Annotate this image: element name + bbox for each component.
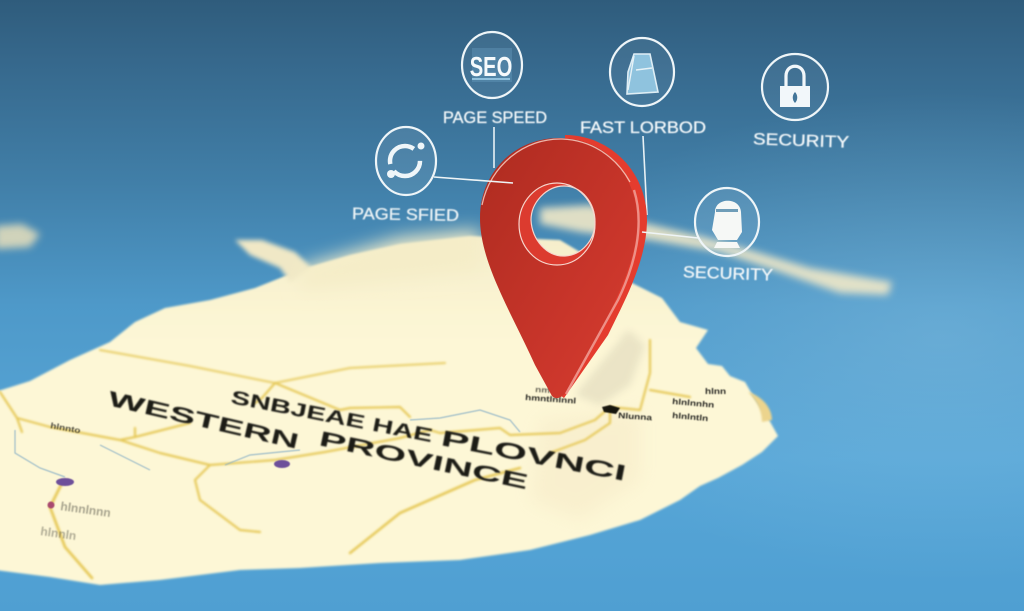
padlock icon bbox=[786, 66, 804, 88]
node: security lock bbox=[762, 54, 828, 120]
small bay sandbar bbox=[748, 392, 772, 422]
label: plovnci: PLOVNCI bbox=[439, 425, 628, 486]
rivers bbox=[15, 410, 520, 477]
label: page speed top: PAGE SPEED bbox=[443, 108, 547, 127]
node: security robot bbox=[695, 188, 759, 256]
city markers bbox=[48, 460, 290, 508]
connector lines over pin bbox=[434, 177, 698, 238]
small map labels: hlnlnnhn bbox=[672, 397, 715, 409]
pin face bbox=[480, 138, 637, 398]
small map labels: hlnn bbox=[705, 387, 726, 396]
node: page speed bbox=[376, 127, 436, 195]
map label: province names bbox=[106, 387, 628, 494]
red map pin bbox=[480, 135, 647, 398]
document icon bbox=[627, 54, 658, 94]
warm tint on map bbox=[530, 410, 640, 520]
peninsula behind pin bbox=[235, 240, 312, 282]
blurred far edge of land bbox=[300, 230, 480, 290]
main landmass bbox=[0, 236, 778, 585]
label: security top right: SECURITY bbox=[753, 129, 849, 152]
helmet icon bbox=[712, 201, 742, 240]
label: western: WESTERN bbox=[106, 387, 301, 454]
label: page sfied: PAGE SFIED bbox=[352, 204, 459, 225]
small map labels: hlnnlnnn bbox=[60, 499, 112, 520]
label: garbled province name: SNBJEAE HAE bbox=[229, 387, 434, 447]
small map labels: Nlunna bbox=[618, 411, 653, 422]
small map labels: hlnnln bbox=[40, 524, 77, 543]
label: fast lorbod: FAST LORBOD bbox=[580, 118, 706, 137]
connector lines behind pin bbox=[494, 127, 647, 215]
small map labels: hmntlnlnnl bbox=[525, 393, 576, 405]
node: seo bbox=[462, 32, 522, 98]
label: security lower: SECURITY bbox=[683, 262, 773, 285]
small map labels: hlnnto bbox=[50, 421, 82, 435]
small map labels bbox=[40, 385, 726, 543]
soft shadow of pin on map bbox=[575, 330, 645, 405]
pin side depth bbox=[556, 135, 647, 398]
label: province: PROVINCE bbox=[317, 427, 530, 494]
node: fast loading bbox=[610, 38, 674, 106]
pin hole inner wall bbox=[519, 183, 595, 265]
distant island strip right bbox=[540, 205, 892, 295]
distant island left bbox=[0, 224, 40, 249]
small map labels: hlnlntln bbox=[672, 411, 709, 423]
road network bbox=[0, 340, 690, 578]
city block near pin tip bbox=[602, 405, 620, 414]
gauge ring icon bbox=[390, 146, 420, 176]
pin highlight edge bbox=[482, 139, 630, 205]
small map labels: nmtna bbox=[535, 385, 566, 396]
seo icon text: SEO bbox=[470, 52, 512, 83]
